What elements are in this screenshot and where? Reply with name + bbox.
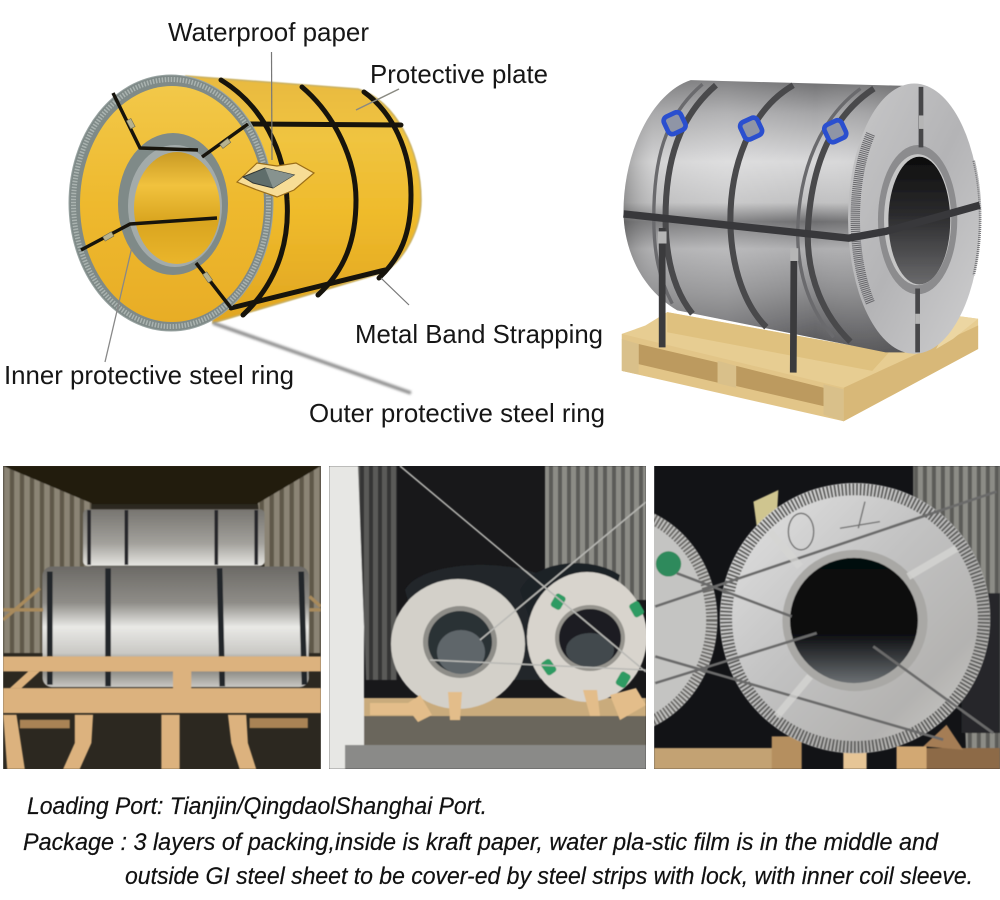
blue strap clips <box>662 111 848 144</box>
panel: yellow coil packaging diagram <box>4 17 605 428</box>
inner protective steel ring <box>118 133 228 275</box>
marking on coil face <box>788 502 880 550</box>
photo: two wrapped coils in container <box>329 466 646 769</box>
strap clips <box>103 119 231 283</box>
green strap clips <box>540 592 645 689</box>
paper scrap <box>753 490 778 527</box>
panel: silver coil on wooden pallet <box>622 80 980 421</box>
side braces <box>3 588 321 620</box>
horizontal strap <box>624 205 980 238</box>
caption: package line two: outside GI steel sheet to be cover-ed by steel strips with lock, with inner coil sleeve. <box>125 863 973 890</box>
main coil <box>720 483 990 753</box>
timber frame <box>3 656 321 769</box>
body metal band straps <box>202 80 411 315</box>
container door <box>329 466 364 769</box>
label: inner protective steel ring: Inner protective steel ring <box>4 360 294 390</box>
container walls <box>3 466 91 653</box>
photo: large coil end view in container <box>654 466 1000 769</box>
coil end face <box>848 84 980 354</box>
leader line: inner protective steel ring <box>105 247 132 362</box>
caption: package line one: Package : 3 layers of packing,inside is kraft paper, water pla-stic film is in the middle and <box>23 829 939 856</box>
rear coil <box>83 509 265 566</box>
label: metal band strapping: Metal Band Strapping <box>355 319 603 349</box>
left corrugated wall <box>358 466 397 680</box>
circumferential straps <box>654 84 874 342</box>
front coil <box>42 567 309 687</box>
caption: loading port: Loading Port: Tianjin/QingdaolShanghai Port. <box>27 793 487 820</box>
coil body <box>624 80 919 352</box>
coil front face <box>80 86 264 322</box>
strap seals <box>658 115 924 324</box>
left neighbouring coil <box>503 503 717 736</box>
pallet tie-down straps <box>662 228 794 373</box>
wooden chocks <box>370 688 646 722</box>
right corrugated wall <box>913 466 1000 769</box>
wooden pallet <box>622 312 978 421</box>
face straps <box>81 93 248 308</box>
leader line: waterproof paper <box>270 52 273 160</box>
leader line: protective plate <box>356 89 399 110</box>
coil bore <box>888 157 950 285</box>
label: outer protective steel ring: Outer protective steel ring <box>309 398 605 428</box>
coil bore <box>134 152 220 264</box>
pale face straps <box>770 532 957 716</box>
face vertical straps <box>918 87 921 352</box>
torn wrapper revealing waterproof paper <box>237 163 314 197</box>
right corrugated wall <box>545 466 646 600</box>
outer protective steel ring <box>69 75 273 331</box>
photo: coils braced with timber in container <box>3 466 321 769</box>
right wrapped coil <box>520 563 647 702</box>
container ceiling <box>3 466 321 504</box>
green clip <box>656 551 681 577</box>
leader line: outer protective steel ring <box>213 323 411 393</box>
label: waterproof paper: Waterproof paper <box>168 17 369 47</box>
lashing wires <box>400 466 646 672</box>
ground and beam <box>364 712 646 746</box>
timber base <box>654 725 1000 769</box>
left wrapped coil <box>391 565 560 709</box>
coil body <box>186 76 421 323</box>
steel lashing straps <box>655 492 996 740</box>
leader line: metal band strapping <box>381 278 409 305</box>
label: protective plate: Protective plate <box>370 59 548 89</box>
